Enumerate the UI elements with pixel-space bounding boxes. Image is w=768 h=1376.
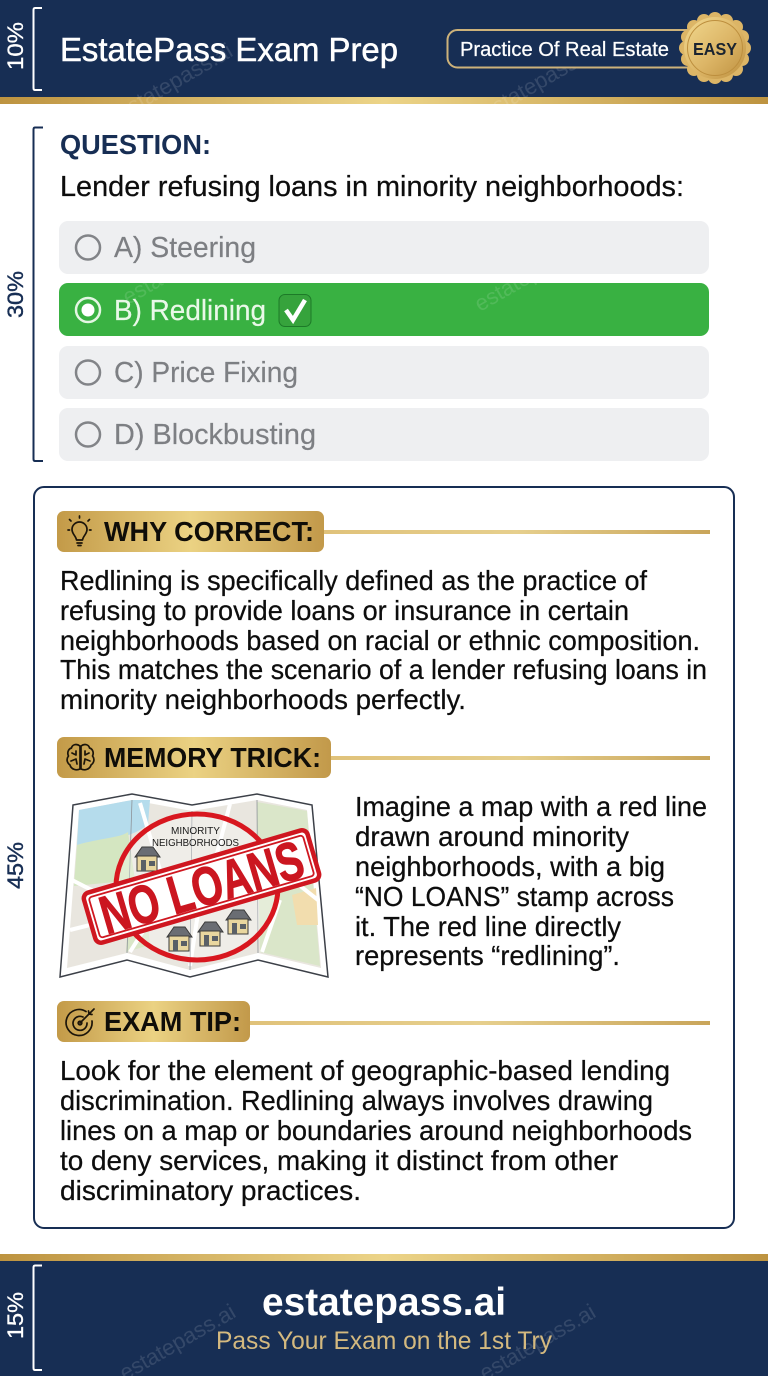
- option B correct: estatepass.ai: [470, 230, 595, 316]
- icon: check mark: [279, 294, 311, 326]
- difficulty badge: EASY: [693, 39, 737, 59]
- question heading: QUESTION:: [60, 129, 211, 160]
- map label: MINORITY: [171, 825, 220, 837]
- subject pill: Practice Of Real Estate: [460, 38, 669, 61]
- footer band: [0, 1254, 768, 1376]
- stamp: NO LOANS: [93, 830, 311, 946]
- exam tip text: [60, 1055, 692, 1206]
- header bracket: [34, 8, 42, 90]
- option B correct: estatepass.ai: [118, 223, 243, 309]
- exam tip text: discriminatory practices.: [60, 1175, 361, 1206]
- subject pill: [448, 30, 698, 68]
- header 10% label: 10%: [3, 22, 28, 70]
- footer tagline: Pass Your Exam on the 1st Try: [216, 1327, 552, 1355]
- stamp: [82, 826, 322, 949]
- question 30% label: 30%: [3, 271, 28, 318]
- option A: [59, 221, 709, 274]
- question bracket: [34, 128, 43, 461]
- option B correct: B) Redlining: [114, 295, 266, 327]
- difficulty badge: [679, 12, 751, 84]
- explanation 45% label: 45%: [3, 842, 28, 889]
- memory trick text: neighborhoods, with a big: [355, 851, 665, 882]
- exam tip text: to deny services, making it distinct from other: [60, 1145, 618, 1176]
- heading: exam tip: EXAM TIP:: [104, 1006, 241, 1037]
- houses: [135, 847, 251, 951]
- exam tip text: Look for the element of geographic-based lending: [60, 1055, 670, 1086]
- memory trick text: [355, 791, 707, 971]
- exam tip text: discrimination. Redlining always involves drawing: [60, 1085, 653, 1116]
- icon: target: [66, 1009, 94, 1036]
- why correct text: minority neighborhoods perfectly.: [60, 684, 466, 715]
- footer brand: estatepass.ai: [262, 1281, 506, 1324]
- memory trick text: drawn around minority: [355, 821, 629, 852]
- heading: memory trick: MEMORY TRICK:: [104, 742, 321, 773]
- why correct text: This matches the scenario of a lender refusing loans in: [60, 654, 707, 685]
- memory trick text: represents “redlining”.: [355, 940, 620, 971]
- option C: C) Price Fixing: [114, 357, 298, 389]
- footer bracket: [34, 1266, 42, 1370]
- map sheet: [60, 794, 328, 977]
- heading: memory trick: [57, 737, 710, 778]
- option C: [59, 346, 709, 399]
- option D: D) Blockbusting: [114, 419, 316, 451]
- why correct text: refusing to provide loans or insurance in certain: [60, 595, 629, 626]
- memory trick text: “NO LOANS” stamp across: [355, 881, 674, 912]
- map label: NEIGHBORHOODS: [152, 837, 239, 849]
- memory trick text: it. The red line directly: [355, 911, 621, 942]
- illustration: map with no loans stamp: [60, 794, 328, 977]
- question text: Lender refusing loans in minority neighborhoods:: [60, 171, 684, 203]
- memory trick text: Imagine a map with a red line: [355, 791, 707, 822]
- map label: [152, 825, 239, 849]
- why correct text: [60, 565, 707, 715]
- panel: explanation: [34, 487, 734, 1228]
- header band: estatepass.ai: [477, 38, 602, 124]
- option A: A) Steering: [114, 232, 256, 264]
- option D: [59, 408, 709, 461]
- header band: [0, 0, 768, 104]
- exam tip text: lines on a map or boundaries around neighborhoods: [60, 1115, 692, 1146]
- red circle boundary: [116, 814, 278, 960]
- why correct text: Redlining is specifically defined as the practice of: [60, 565, 647, 596]
- heading: why correct: [57, 511, 710, 552]
- option B correct: [59, 283, 709, 336]
- header title: EstatePass Exam Prep: [60, 31, 398, 68]
- icon: light bulb: [68, 516, 91, 546]
- why correct text: neighborhoods based on racial or ethnic composition.: [60, 625, 700, 656]
- heading: exam tip: [57, 1001, 710, 1042]
- heading: why correct: WHY CORRECT:: [104, 516, 314, 547]
- header band: estatepass.ai: [112, 38, 237, 124]
- icon: brain: [67, 745, 94, 770]
- footer 15% label: 15%: [3, 1292, 28, 1339]
